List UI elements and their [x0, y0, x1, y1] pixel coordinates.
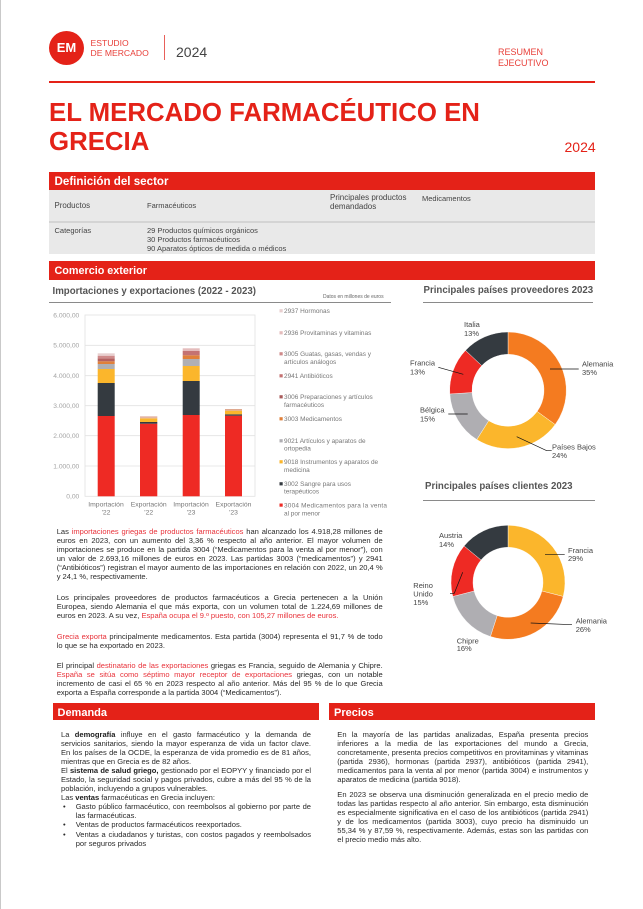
header rule	[49, 80, 595, 82]
text block: destinos: España se sitúa como séptimo mayor receptor de exportaciones griegas, con un notable	[57, 670, 383, 679]
y axis labels: 5.000,00	[53, 343, 80, 350]
text block: exportaciones	[57, 632, 383, 650]
clients heading: Principales países clientes 2023	[425, 481, 573, 492]
legend: 3005 Guatas, gasas, vendas y	[284, 351, 372, 358]
text block: demanda: •	[63, 802, 66, 811]
donut labels: 35%	[582, 368, 597, 377]
legend: 3006 Preparaciones y artículos	[284, 394, 373, 401]
donut labels: 15%	[420, 414, 435, 424]
heading: demanda: Demanda	[58, 707, 107, 719]
bar: importacion 23	[183, 348, 200, 496]
row: categorias value: 29 Productos químicos orgánicos	[147, 226, 258, 234]
text block: demanda	[61, 730, 311, 848]
bar chart	[53, 308, 387, 517]
y axis labels: 3.000,00	[53, 403, 80, 410]
x axis labels: Exportación	[216, 502, 252, 508]
title: GRECIA	[49, 128, 149, 156]
donut chart: clients	[413, 525, 608, 653]
resumen ejecutivo label	[498, 47, 549, 68]
text block: precios parrafo 2: 55,34 % y 87,59 %, respectivamente. Además, estas son las partidas con	[337, 826, 588, 835]
text block: precios parrafo 2: todas las partidas respecto al año anterior. Sin embargo, esta disminución	[337, 799, 588, 808]
y axis labels: 0,00	[66, 494, 80, 501]
text block: exportaciones: Grecia exporta principalmente medicamentos. Esta partida (3004) representa el 91,7 % de todo	[57, 632, 383, 641]
donut labels: 16%	[457, 644, 472, 653]
donut labels: Alemania	[582, 360, 614, 368]
header divider	[164, 35, 165, 60]
legend: 3003 Medicamentos	[284, 416, 342, 423]
leader lines	[450, 554, 572, 625]
bar: importacion 22	[98, 353, 115, 496]
text block: importaciones: y 24,1 %, respectivamente.	[57, 572, 148, 581]
y axis labels: 4.000,00	[53, 373, 80, 380]
principal products label: Principales productos	[330, 192, 406, 202]
logo text: DE MERCADO	[90, 48, 149, 58]
text block: demanda: población, incluyendo a grupos vulnerables.	[61, 784, 208, 793]
x axis labels: '23	[187, 510, 196, 517]
text block: importaciones: un valor de 2.693,16 millones de euros en 2023. Las partidas 3003 (“medicamentos”) y 2941	[57, 554, 383, 563]
text block: proveedores: euros en 2023. A su vez, España ocupa el 9.º puesto, con 105,27 millones de euros.	[57, 611, 338, 620]
suppliers heading rule	[423, 302, 593, 303]
donut labels: 24%	[552, 451, 567, 460]
legend: 3002 Sangre para usos	[284, 481, 351, 488]
text block: proveedores	[57, 593, 383, 620]
title year: 2024	[564, 139, 596, 155]
donut labels: 13%	[410, 368, 425, 377]
legend	[280, 308, 387, 517]
text block: importaciones: (“Antibióticos”) registran el mayor aumento de las importaciones en relación con 2022, un 20,4 %	[57, 563, 383, 572]
donut labels	[410, 320, 614, 460]
text block: precios parrafo 1: concretamente, presenta precios competitivos en provitaminas y vitaminas	[337, 748, 588, 757]
text block: demanda: por seguros privados	[76, 839, 146, 848]
text block: demanda: •	[63, 830, 66, 839]
principal products label: demandados	[330, 202, 376, 211]
text block: destinos: incremento de casi el 65 % en 2023 respecto al año anterior. Más del 95 % de lo que Grecia	[57, 679, 383, 688]
donut labels: Chipre	[457, 636, 479, 645]
resumen ejecutivo label: EJECUTIVO	[498, 58, 549, 68]
heading: comercio exterior: Comercio exterior	[54, 265, 147, 277]
donut labels: Francia	[568, 546, 594, 555]
text block: demanda: Estado, la seguridad social y pagos privados, cubre a más del 95 % de la	[61, 775, 311, 784]
text block: precios parrafo 2: En 2023 se observa una disminución generalizada en el precio medio de	[337, 790, 588, 799]
table divider	[49, 221, 595, 223]
text block: demanda: Las ventas farmacéuticas en Grecia incluyen:	[61, 793, 215, 802]
legend: al por menor	[284, 510, 321, 517]
legend: 3004 Medicamentos para la venta	[284, 502, 387, 509]
text block: importaciones	[56, 527, 383, 581]
text block: exportaciones: lo que se ha exportado en 2023.	[57, 641, 165, 650]
text block: destinos: exporta a España corresponde a la partida 3004 (“Medicamentos”).	[57, 688, 282, 697]
x axis labels: '22	[144, 510, 153, 517]
donut labels: 26%	[576, 625, 591, 634]
text block: destinos: El principal destinatario de las exportaciones griegas es Francia, seguido de Alemania y Chipre.	[57, 661, 383, 670]
text block: precios parrafo 1	[337, 730, 588, 784]
row: productos label: Productos	[54, 200, 90, 210]
title	[49, 98, 480, 156]
heading: comercio exterior	[49, 261, 595, 280]
text block: demanda: mientras que en Grecia es de 82 años.	[61, 757, 191, 766]
legend: medicina	[284, 467, 310, 474]
heading: definicion del sector	[49, 172, 595, 190]
legend: 9018 Instrumentos y aparatos de	[284, 459, 379, 466]
text block: demanda: servicios sanitarios, siendo la mayor esperanza de vida un factor clave.	[61, 739, 311, 748]
legend: 2941 Antibióticos	[284, 373, 333, 380]
text block: proveedores: Europea, siendo Alemania el que más exporta, con un volumen total de 1.224,69 millones de	[57, 602, 383, 611]
text block: proveedores: Los principales proveedores de productos farmacéuticos a Grecia pertenecen a la Unión	[57, 593, 383, 602]
text block: importaciones: euros en 2023, con un aumento del 3,36 % respecto al año anterior. El mayor volumen de	[57, 536, 383, 545]
text block: precios parrafo 1: (partida 2936), hormonas (partida 2937), antibióticos (partida 2941),	[337, 757, 588, 766]
header year: 2024	[176, 44, 207, 60]
chart heading: Importaciones y exportaciones (2022 - 2023)	[52, 286, 256, 297]
text block: demanda: En los países de la OCDE, la esperanza de vida promedio es de 81 años,	[61, 748, 311, 757]
x axis labels: '23	[229, 510, 238, 517]
text block: demanda: Ventas de productos farmacéuticos reexportados.	[76, 820, 242, 829]
heading: definicion del sector: Definición del sector	[54, 175, 169, 188]
logo circle EM	[49, 31, 84, 65]
x axis labels	[88, 502, 252, 517]
table background	[49, 190, 595, 254]
legend: ortopedia	[284, 445, 311, 452]
text block: importaciones: importaciones se produce en la partida 3004 (“Medicamentos para la venta al por menor”), con	[57, 545, 383, 554]
donut labels: Italia	[464, 320, 481, 329]
donut labels	[413, 531, 608, 653]
row: productos value: Farmacéuticos	[147, 200, 196, 210]
legend: terapéuticos	[284, 488, 319, 495]
x axis labels: Importación	[88, 502, 124, 508]
resumen ejecutivo label: RESUMEN	[498, 47, 543, 57]
text block: demanda: las farmacéuticas.	[76, 811, 137, 820]
title: EL MERCADO FARMACÉUTICO EN	[49, 99, 480, 127]
clients heading rule	[423, 500, 595, 501]
donut segments	[451, 525, 565, 639]
text block: precios parrafo 1: En la mayoría de las partidas analizadas, España presenta precios	[337, 730, 588, 739]
text block: demanda: Ventas a ciudadanos y turistas, con costos pagados y reembolsados	[76, 830, 311, 839]
text block: demanda: El sistema de salud griego, gestionado por el EOPYY y financiado por el	[61, 766, 311, 775]
logo text: ESTUDIO	[90, 38, 129, 48]
heading: demanda	[52, 703, 318, 720]
y axis labels: 1.000,00	[53, 463, 80, 470]
donut labels: Alemania	[576, 616, 608, 625]
heading: precios: Precios	[334, 707, 374, 719]
legend: 2936 Provitaminas y vitaminas	[284, 330, 371, 337]
legend: 2937 Hormonas	[284, 308, 330, 315]
page edge line	[0, 0, 1, 909]
text block: precios parrafo 2: y de los medicamentos (partida 3003), cuyo precio ha disminuido un	[337, 817, 588, 826]
text block: precios parrafo 1: inferiores a la media de las exportaciones del mundo a Grecia,	[337, 739, 588, 748]
text block: precios parrafo 2: es especialmente significativa en el caso de los antibióticos (partida 2941)	[337, 808, 588, 817]
text block: demanda: La demografía influye en el gasto farmacéutico y la demanda de	[61, 730, 311, 739]
donut segments	[450, 332, 566, 449]
bar: exportacion 23	[225, 409, 242, 496]
principal products value: Medicamentos	[422, 194, 471, 203]
donut labels: Reino	[413, 581, 433, 590]
text block: precios parrafo 2: el precio medio más alto.	[337, 835, 421, 844]
row: categorias value: 30 Productos farmacéuticos	[147, 235, 240, 244]
x axis labels: '22	[102, 510, 111, 517]
text block: importaciones: Las importaciones griegas de productos farmacéuticos han alcanzado los 4.918,28 millones de	[57, 527, 383, 536]
donut labels: Bélgica	[420, 406, 445, 414]
donut labels: 14%	[439, 540, 454, 549]
y axis labels: 2.000,00	[53, 433, 80, 440]
row: categorias label: Categorías	[54, 226, 91, 234]
x axis labels: Exportación	[131, 502, 167, 508]
chart units note: Datos en millones de euros	[323, 294, 384, 300]
row: categorias value	[147, 226, 286, 253]
text block: demanda: •	[63, 820, 66, 829]
donut labels: Austria	[439, 531, 463, 540]
logo circle EM: EM	[57, 40, 76, 55]
donut labels: 15%	[413, 598, 429, 607]
y axis labels: 6.000,00	[53, 312, 80, 319]
x axis labels: Importación	[173, 502, 209, 508]
bar: exportacion 22	[140, 416, 157, 496]
legend: farmacéuticos	[284, 402, 324, 409]
suppliers heading: Principales países proveedores 2023	[424, 285, 593, 296]
text block: demanda: Gasto público farmacéutico, con reembolsos al gobierno por parte de	[76, 802, 311, 811]
panel: definicion del sector	[49, 172, 595, 254]
donut chart: suppliers	[410, 320, 614, 460]
legend: 9021 Artículos y aparatos de	[284, 438, 366, 445]
principal products label	[330, 192, 406, 211]
donut labels: 29%	[568, 554, 583, 563]
logo text	[90, 38, 149, 58]
donut labels: Países Bajos	[552, 442, 596, 452]
chart heading rule	[49, 302, 391, 303]
leader lines	[438, 367, 579, 451]
donut labels: 13%	[464, 329, 479, 338]
text block: precios parrafo 1: aparatos de medicina (partida 9018).	[337, 775, 461, 784]
y axis labels	[53, 312, 80, 501]
text block: precios parrafo 2	[337, 790, 588, 844]
legend: artículos análogos	[284, 359, 336, 366]
donut labels: Francia	[410, 359, 436, 368]
text block: precios parrafo 1: medicamentos para la venta al por menor (partida 3004) e instrumentos y	[337, 766, 588, 775]
donut labels: Unido	[413, 589, 433, 598]
row: categorias value: 90 Aparatos ópticos de medida o médicos	[147, 244, 286, 253]
text block: destinos	[57, 661, 383, 697]
heading: precios	[329, 703, 595, 720]
plot grid	[85, 315, 255, 496]
